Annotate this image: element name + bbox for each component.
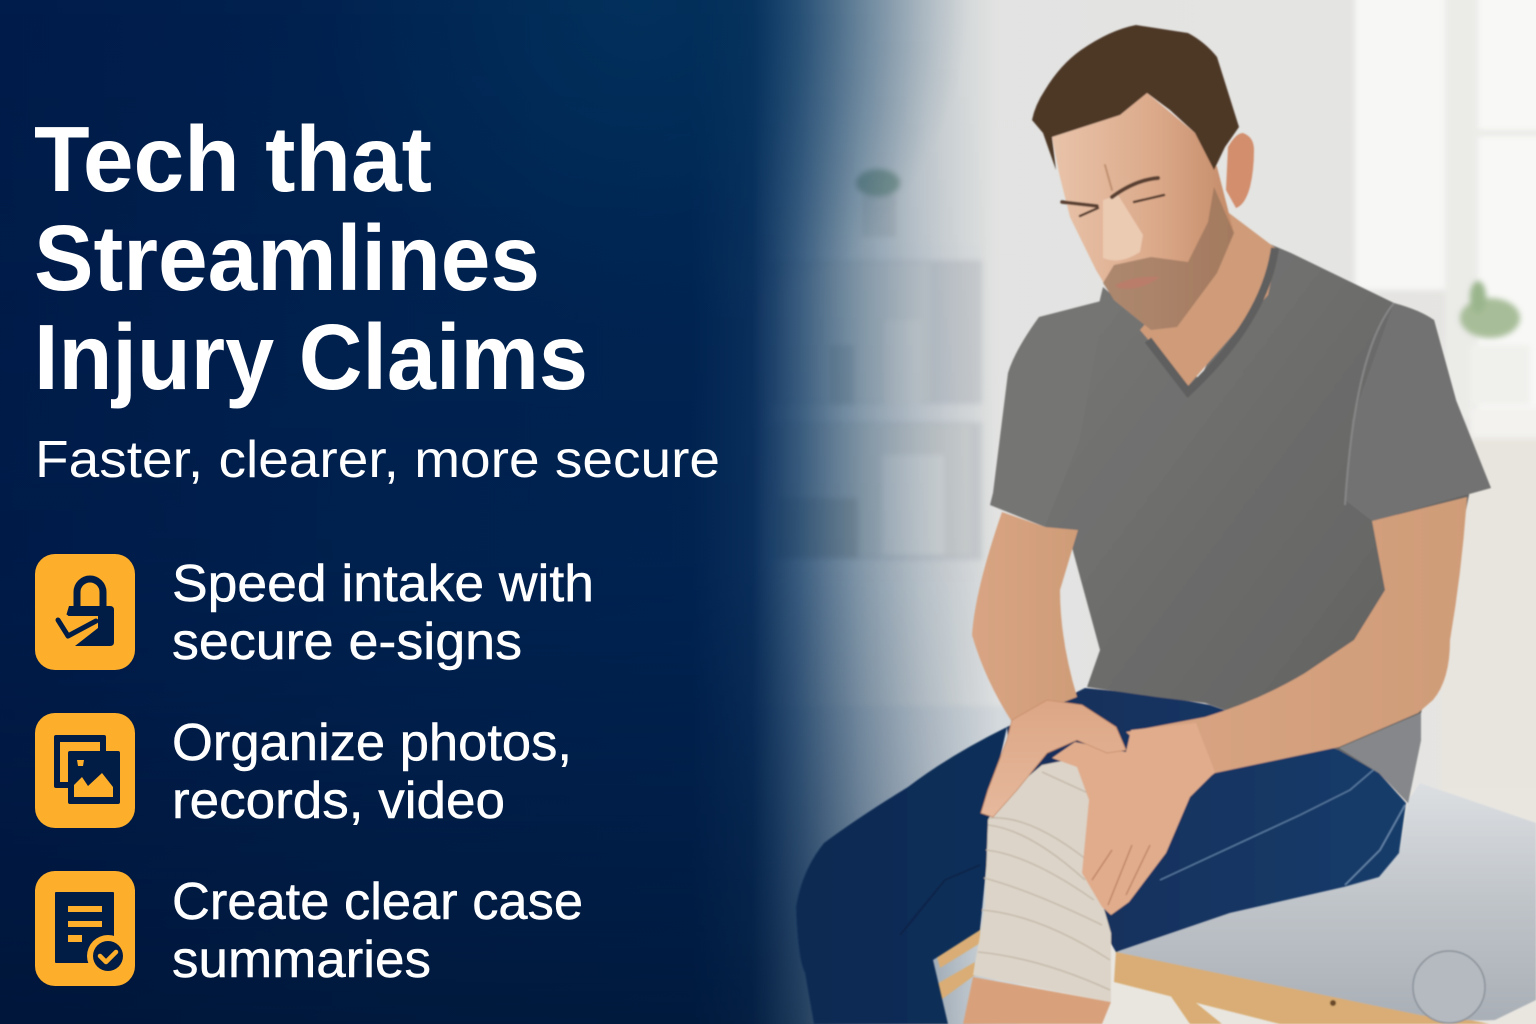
right sleeve <box>1345 303 1491 521</box>
torso <box>1045 240 1470 803</box>
benefit 3: summaries <box>35 871 583 989</box>
nose <box>1103 195 1143 260</box>
text: organize <box>172 714 572 830</box>
bandage <box>973 760 1111 1002</box>
icon: padlock with checkmark <box>35 554 135 670</box>
icon: stacked photos <box>35 713 135 828</box>
text: speed intake: secure e-signs <box>172 613 522 671</box>
head <box>1032 25 1254 330</box>
title: Streamlines <box>34 206 540 310</box>
shelf <box>700 169 1030 1024</box>
text: case summaries: Create clear case <box>172 873 583 931</box>
text: organize: records, video <box>172 772 505 830</box>
right hand <box>1052 723 1215 915</box>
text: organize: Organize photos, <box>172 714 572 772</box>
benefit 1: e-signs <box>35 554 594 671</box>
left sleeve <box>990 300 1105 527</box>
man: seated patient holding bandaged knee <box>796 25 1491 1024</box>
brows and eyes <box>1062 165 1164 216</box>
text: case summaries: summaries <box>172 931 431 989</box>
subtitle: Faster, clearer, more secure <box>35 431 720 489</box>
neck <box>1140 210 1278 386</box>
collar <box>1148 248 1275 392</box>
text: speed intake: Speed intake with <box>172 555 594 613</box>
mouth <box>1115 277 1160 289</box>
lower leg skin <box>963 977 1111 1024</box>
benefit 2: photos <box>35 713 572 830</box>
left hand <box>981 700 1126 817</box>
title: Injury Claims <box>34 305 588 409</box>
hair <box>1032 25 1239 170</box>
icon: document with check badge <box>35 871 135 986</box>
shirt hem <box>1339 713 1421 803</box>
massage table with wooden legs <box>935 783 1536 1024</box>
jeans <box>796 688 1406 1024</box>
plant <box>1460 281 1530 405</box>
text: speed intake <box>172 555 594 671</box>
left arm <box>972 512 1078 722</box>
text: case summaries <box>172 873 583 989</box>
right arm <box>1126 497 1467 790</box>
title: Tech that <box>34 107 432 211</box>
beard <box>1103 187 1234 330</box>
title <box>34 107 588 409</box>
ear <box>1226 133 1254 208</box>
photo background: clinic room <box>600 0 1536 1024</box>
face <box>1052 93 1234 330</box>
dark navy panel with gradient fade <box>0 0 986 1024</box>
